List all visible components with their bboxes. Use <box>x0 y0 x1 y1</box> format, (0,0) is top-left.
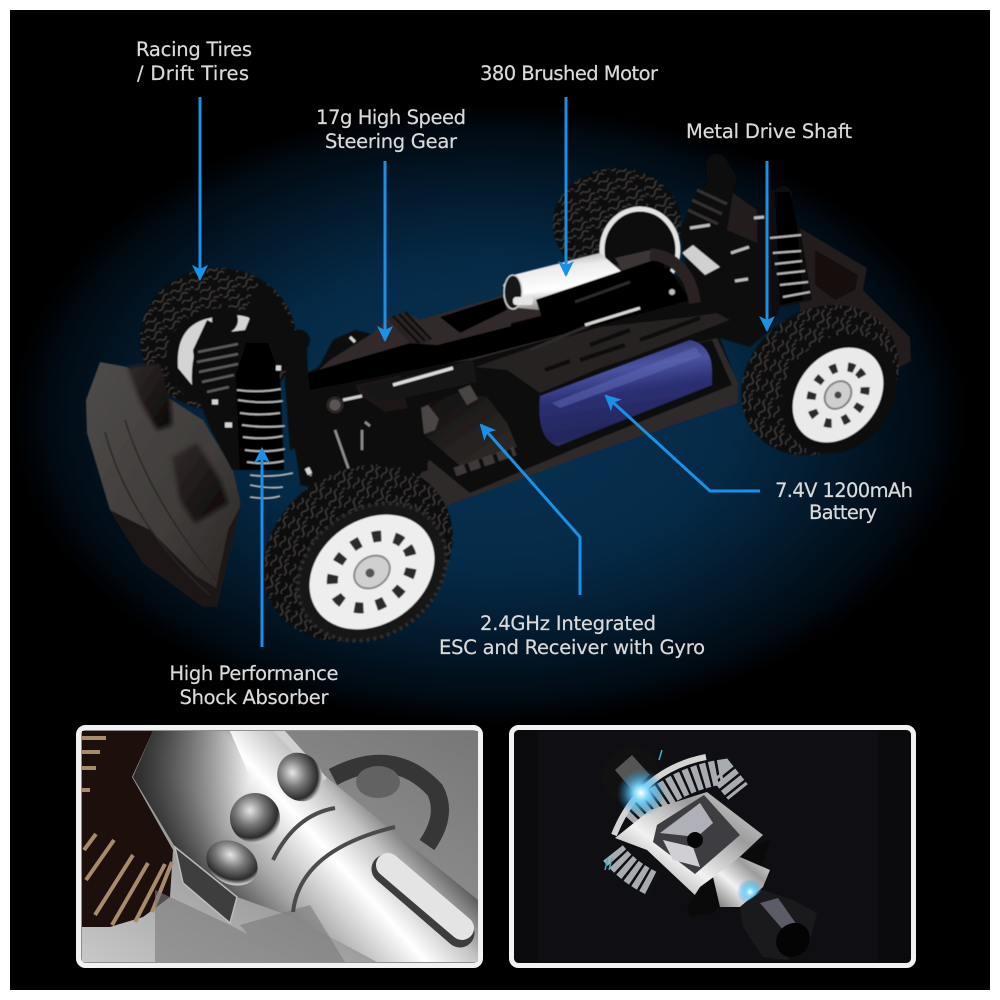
label: shock absorber: Shock Absorber <box>180 686 329 709</box>
bumper-side dark mass <box>195 380 245 470</box>
arrow: battery <box>606 396 760 491</box>
arrow: racing tires <box>198 97 202 279</box>
tray interior <box>405 340 732 493</box>
arrow: brushed motor <box>564 97 568 275</box>
front shock absorber <box>236 343 293 498</box>
arrow: steering gear <box>384 161 386 340</box>
label: steering gear <box>316 106 466 153</box>
differential window <box>653 795 740 874</box>
bumper mount front <box>172 443 228 523</box>
upper gear petals <box>660 803 713 837</box>
ball middle <box>230 793 280 843</box>
battery strap post <box>504 354 540 445</box>
ball top <box>277 752 322 802</box>
battery end cap <box>522 390 556 452</box>
steering servo ribs <box>387 312 433 347</box>
rear shock knob <box>774 186 792 204</box>
bumper lower band <box>110 507 240 607</box>
shaft shading <box>133 731 248 852</box>
left end dome <box>310 330 385 375</box>
rear tower knob <box>706 154 728 176</box>
rear bumper inner block <box>815 250 858 300</box>
label: racing tires: / Drift Tires <box>137 62 249 85</box>
label: steering gear: Steering Gear <box>325 130 458 153</box>
label: ESC and receiver <box>439 612 705 659</box>
deck recess <box>440 297 507 333</box>
gear teeth lower <box>613 853 653 884</box>
rear-right wheel <box>553 168 681 291</box>
label: steering gear: 17g High Speed <box>316 106 466 129</box>
right output cup <box>740 890 817 964</box>
silver steering rod <box>393 368 453 385</box>
front chassis cluster <box>285 380 428 490</box>
label: battery <box>775 479 913 524</box>
gear guard arc <box>650 254 695 303</box>
RC car chassis <box>86 154 929 678</box>
rear-left shock <box>193 307 243 407</box>
panel: differential close-up <box>512 728 914 966</box>
centre hole <box>687 832 703 848</box>
spark glow <box>617 769 665 817</box>
lower battery tray <box>417 338 738 508</box>
black rail <box>308 268 690 390</box>
gear ring rim <box>614 757 706 835</box>
ball joints <box>212 368 310 474</box>
gearbox bolt <box>669 289 675 295</box>
shaft key <box>386 865 462 933</box>
label: racing tires: Racing Tires <box>136 38 252 61</box>
shaft highlights <box>530 282 630 350</box>
ESC connector <box>416 405 439 434</box>
arrow: ESC and receiver <box>481 425 580 595</box>
bumper contours <box>105 420 218 595</box>
label: ESC and receiver: ESC and Receiver with Gyro <box>439 636 705 659</box>
differential body <box>615 792 763 897</box>
rear-left coil <box>688 190 727 224</box>
arrow: shock absorber <box>260 449 264 647</box>
dome pin <box>350 337 355 342</box>
white gearbox block <box>682 245 720 275</box>
centre plate <box>475 313 730 393</box>
cyan sparks <box>605 750 662 870</box>
ball bottom <box>206 840 258 886</box>
plate under rail <box>360 360 477 400</box>
steering eyelet <box>328 398 342 412</box>
deck slots <box>447 317 545 345</box>
label: shock absorber <box>170 662 338 709</box>
rear tower pins <box>690 217 764 281</box>
ESC and receiver box <box>407 393 517 466</box>
output cylinder <box>713 857 770 907</box>
front bumper <box>86 362 240 607</box>
motor end plate <box>615 250 665 275</box>
bumper mount rear <box>127 363 172 430</box>
centre plate slots <box>545 318 700 370</box>
shaft <box>133 731 478 962</box>
arrow: drive shaft <box>766 161 768 330</box>
upper block <box>273 731 327 782</box>
gear <box>82 731 173 927</box>
rear bumper <box>800 228 911 368</box>
label: racing tires <box>136 38 252 85</box>
front-left wheel <box>229 428 487 678</box>
label: ESC and receiver: 2.4GHz Integrated <box>480 612 656 635</box>
receiver plug <box>458 385 478 405</box>
rear tower <box>680 155 812 347</box>
collar disc <box>687 840 770 917</box>
suspension post <box>285 329 310 450</box>
rear tower crossbar <box>727 193 757 243</box>
rear shock absorber <box>770 192 810 305</box>
front-right wheel <box>711 274 929 486</box>
tray clips <box>455 451 515 472</box>
label: battery: 7.4V 1200mAh <box>775 479 913 502</box>
upper deck plate <box>310 260 660 378</box>
centre drive shaft <box>540 270 665 312</box>
lower translucent plates <box>155 890 345 962</box>
rear knob <box>251 285 273 307</box>
rear-left wheel <box>140 268 296 410</box>
chassis underlay <box>300 262 738 508</box>
blue ring glow <box>738 880 762 904</box>
motor <box>503 253 623 310</box>
bearing window <box>356 766 400 798</box>
silver shaft rod <box>585 308 640 325</box>
label: shock absorber: High Performance <box>170 662 338 685</box>
eyelet arm <box>343 396 362 400</box>
label: metal drive shaft: Metal Drive Shaft <box>686 120 852 143</box>
cluster tabs <box>355 375 408 412</box>
cluster pins <box>307 422 370 476</box>
label: battery: Battery <box>809 501 877 524</box>
left output cup <box>615 755 650 790</box>
battery <box>539 340 712 446</box>
gear teeth upper <box>632 772 738 822</box>
label: brushed motor: 380 Brushed Motor <box>480 62 659 85</box>
panel: metal bearing close-up <box>78 728 480 966</box>
battery highlight <box>552 347 702 408</box>
shaft collars <box>273 808 395 912</box>
lower gear petals <box>663 840 700 867</box>
dark housing ring <box>333 764 440 845</box>
lower bracket <box>175 847 237 923</box>
blue radial glow <box>12 105 968 725</box>
